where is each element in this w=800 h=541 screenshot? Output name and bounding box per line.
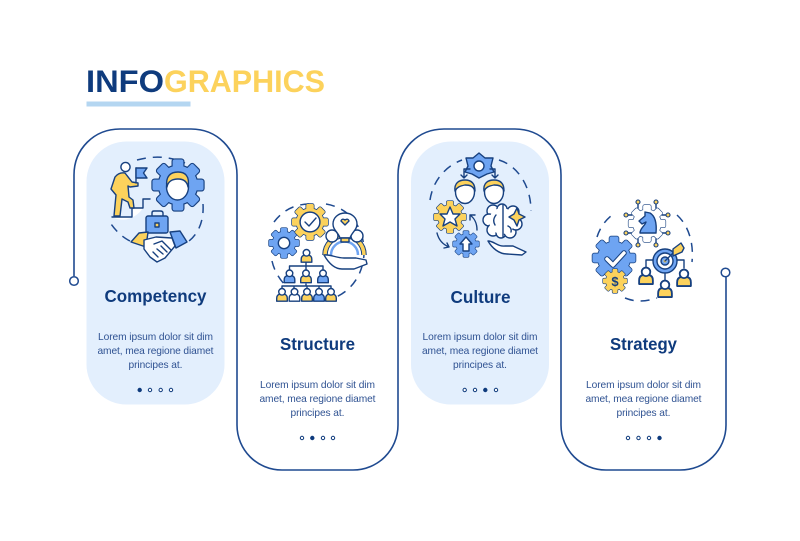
handshake [131, 231, 187, 262]
text: strategy body: principes at. [616, 408, 670, 419]
briefcase [146, 211, 168, 233]
text: competency body: amet, mea regione diamet [98, 346, 214, 357]
panel: competency background [86, 142, 224, 404]
title: GRAPHICS [164, 63, 325, 99]
yellow gear with check [292, 204, 328, 240]
knight hub [624, 200, 670, 247]
target with arrow [646, 243, 684, 280]
heads [455, 180, 504, 204]
heading: structure: Structure [280, 334, 355, 354]
text: strategy body: amet, mea regione diamet [586, 394, 702, 405]
rainbow and clouds [325, 230, 364, 255]
title underline [86, 102, 190, 106]
panel: culture background [411, 142, 549, 404]
team people [639, 268, 691, 297]
heading: culture: Culture [450, 287, 511, 307]
open hand [488, 241, 526, 255]
person climbing stairs [111, 162, 150, 217]
pagination dots 2 [300, 436, 335, 440]
dollar gear: $ [611, 274, 619, 289]
blue gear [269, 228, 299, 258]
text: competency body: principes at. [128, 360, 182, 371]
icon: structure [269, 204, 367, 301]
cycle arrows [437, 215, 477, 248]
connector line [70, 129, 730, 470]
pagination dots 1 [138, 388, 173, 392]
flag [136, 168, 147, 183]
org chart [277, 250, 336, 301]
icon: strategy [592, 200, 692, 301]
gear with head [152, 160, 204, 210]
text: culture body: Lorem ipsum dolor sit dim [422, 332, 538, 343]
heading: competency: Competency [104, 286, 207, 306]
text: competency body: Lorem ipsum dolor sit dim [98, 332, 213, 343]
icon: culture [430, 153, 531, 257]
text: culture body: amet, mea regione diamet [422, 346, 538, 357]
arrows to heads [461, 169, 498, 178]
blue check gear [592, 236, 636, 280]
open hand [324, 255, 367, 269]
text: strategy body: Lorem ipsum dolor sit dim [586, 380, 701, 391]
blue arrow gear [453, 231, 479, 257]
brain [483, 204, 525, 238]
heading: strategy: Strategy [610, 334, 677, 354]
yellow star gear [434, 201, 466, 233]
text: structure body: amet, mea regione diamet [260, 394, 376, 405]
star gear [465, 153, 494, 178]
text: structure body: Lorem ipsum dolor sit dim [260, 380, 375, 391]
pagination dots 3 [463, 388, 498, 392]
pagination dots 4 [626, 436, 661, 440]
icon: competency [111, 157, 204, 262]
lightbulb with heart [333, 213, 357, 242]
text: structure body: principes at. [290, 408, 344, 419]
text: culture body: principes at. [453, 360, 507, 371]
title [86, 63, 325, 99]
title: INFO [86, 63, 164, 99]
